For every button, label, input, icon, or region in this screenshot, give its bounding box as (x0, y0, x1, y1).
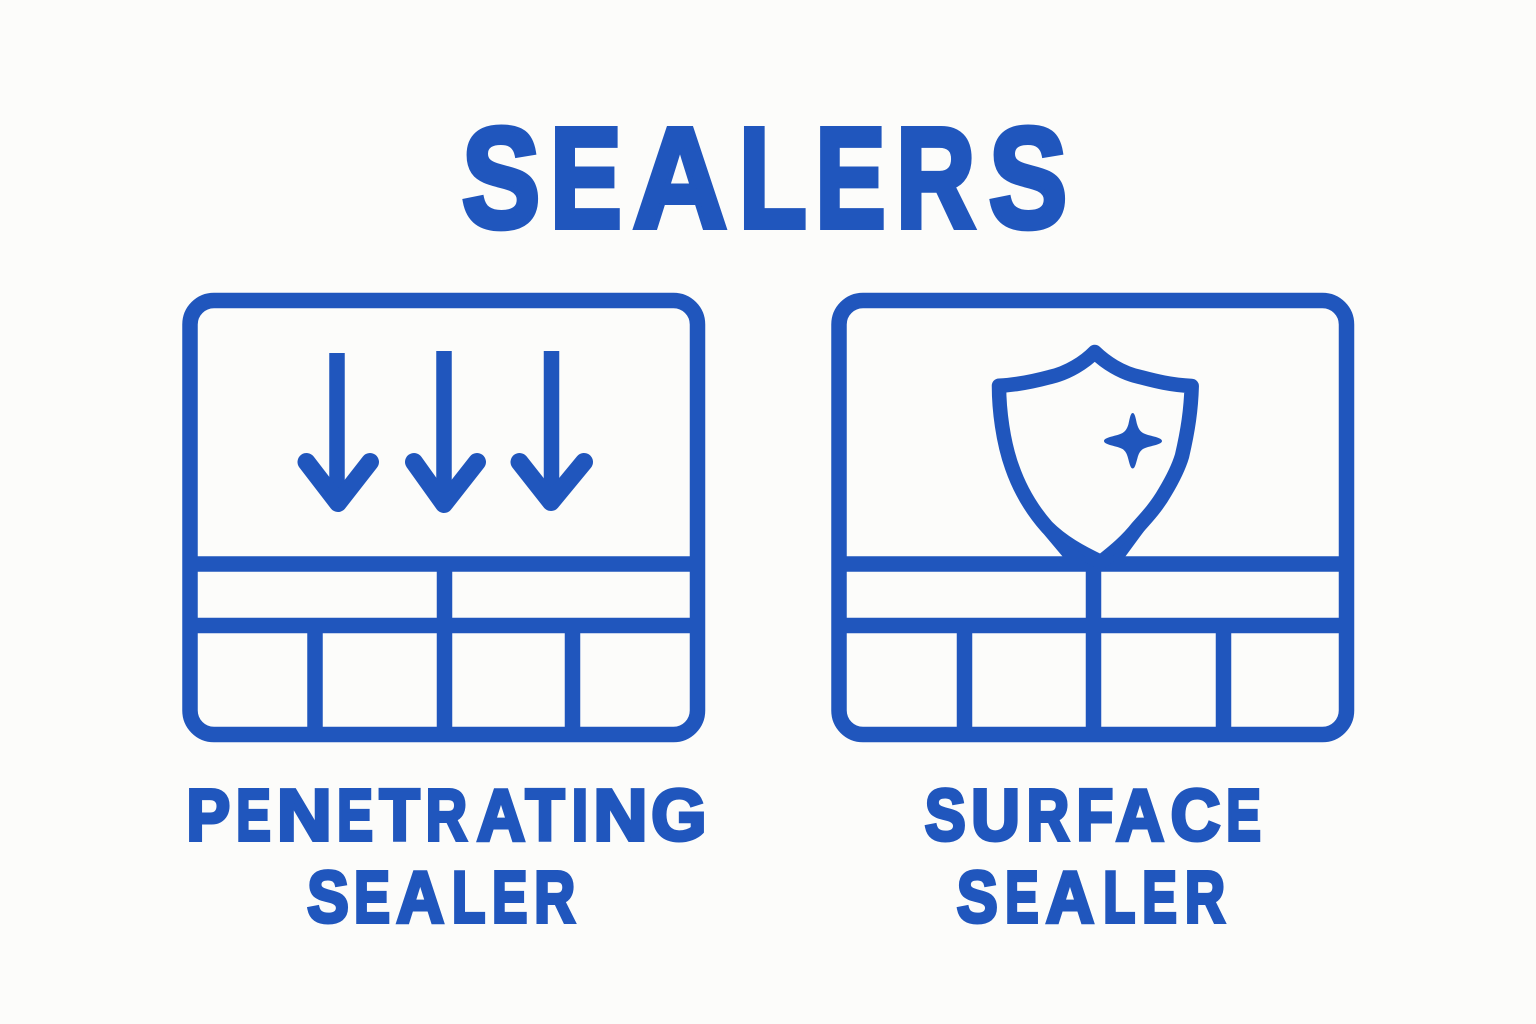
panel frame (839, 300, 1346, 734)
title: S (462, 99, 540, 258)
label: surface sealer: F (1077, 775, 1113, 856)
title: S (989, 99, 1067, 258)
label: surface sealer: A (1046, 857, 1094, 938)
label: penetrating sealer: N (277, 775, 332, 856)
label: surface sealer: E (1142, 857, 1177, 938)
panel frame (190, 300, 698, 734)
shield base flare (1042, 527, 1147, 557)
label: penetrating sealer: T (526, 775, 564, 856)
label: surface sealer: S (925, 775, 966, 856)
label: surface sealer: L (1103, 857, 1135, 938)
label: penetrating sealer: R (426, 775, 467, 856)
label: penetrating sealer: E (236, 775, 271, 856)
label: surface sealer (925, 775, 1261, 938)
label: penetrating sealer: I (572, 775, 588, 856)
arrow 3 (520, 351, 584, 502)
label: penetrating sealer: L (452, 857, 485, 938)
title: A (633, 99, 727, 258)
panel: surface sealer diagram (839, 300, 1346, 734)
title: E (550, 99, 622, 258)
arrow 2 (414, 351, 477, 504)
label: surface sealer: U (971, 775, 1020, 856)
tile grid (190, 564, 697, 734)
sparkle (1104, 413, 1162, 468)
label: penetrating sealer: N (594, 775, 647, 856)
panel: penetrating sealer diagram (190, 300, 698, 734)
label: penetrating sealer (186, 775, 706, 938)
label: penetrating sealer: S (307, 857, 349, 938)
label: surface sealer: C (1171, 775, 1220, 856)
label: penetrating sealer: E (354, 857, 390, 938)
label: surface sealer: R (1027, 775, 1069, 856)
label: surface sealer: S (957, 857, 998, 938)
label: penetrating sealer: T (380, 775, 420, 856)
label: penetrating sealer: P (186, 775, 230, 856)
title: R (896, 99, 975, 258)
label: surface sealer: R (1185, 857, 1225, 938)
label: surface sealer: A (1116, 775, 1164, 856)
arrow 1 (306, 353, 370, 503)
label: penetrating sealer: A (477, 775, 525, 856)
tile grid (839, 564, 1346, 734)
label: penetrating sealer: G (651, 775, 706, 856)
label: surface sealer: E (1226, 775, 1261, 856)
title: E (815, 99, 886, 258)
title: L (739, 99, 807, 258)
icon: three downward arrows (306, 351, 584, 504)
label: penetrating sealer: E (337, 775, 373, 856)
shield outline (999, 352, 1192, 562)
label: penetrating sealer: A (396, 857, 444, 938)
label: penetrating sealer: E (492, 857, 527, 938)
icon: shield with sparkle (999, 352, 1192, 562)
label: penetrating sealer: R (534, 857, 575, 938)
label: surface sealer: E (1005, 857, 1039, 938)
